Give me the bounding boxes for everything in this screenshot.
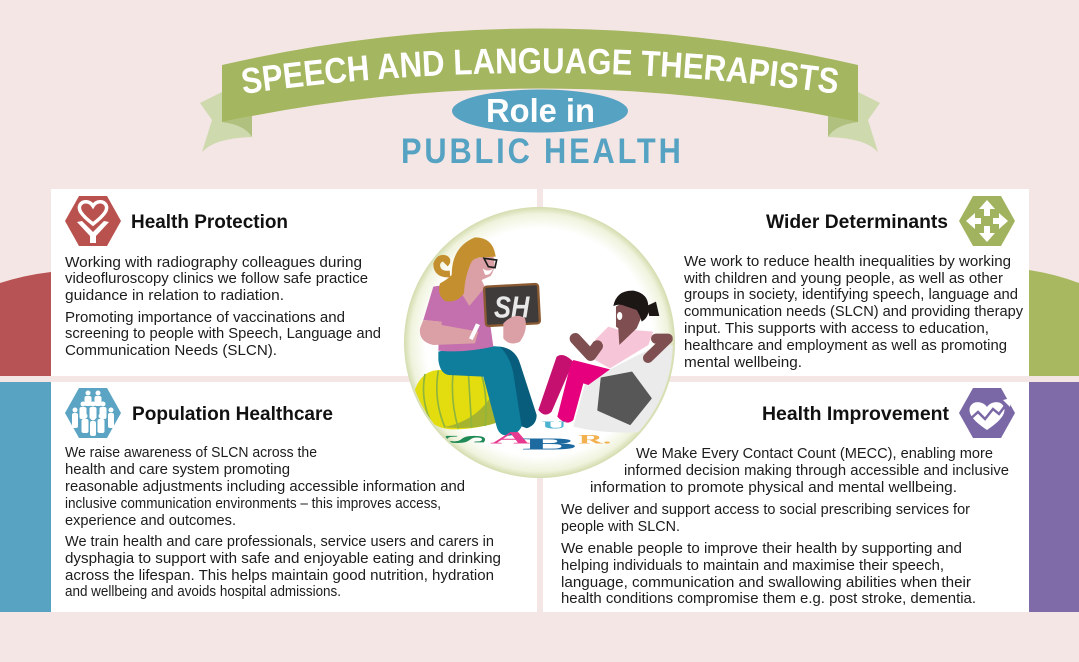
text block: wider determinants: healthcare and employment as well as promoting: [684, 338, 1007, 354]
subtitle: Role in: [452, 90, 628, 132]
panel: wider determinants: [543, 189, 1029, 376]
text block: health protection: Communication Needs (SLCN).: [65, 343, 277, 359]
therapist: [420, 237, 540, 436]
text block: population healthcare: inclusive communication environments – this improves access,: [65, 496, 441, 512]
therapist: SH: [494, 290, 530, 324]
text block: wider determinants: mental wellbeing.: [684, 355, 802, 371]
text block: population healthcare: health and care system promoting: [65, 462, 290, 478]
floor letters: [446, 422, 610, 450]
text block: health protection: Working with radiography colleagues during: [65, 255, 362, 271]
heading: health protection: Health Protection: [131, 211, 288, 233]
text block: health improvement: [561, 446, 1009, 607]
text block: health protection: Promoting importance of vaccinations and: [65, 310, 345, 326]
text block: wider determinants: communication needs (SLCN) and providing therapy: [684, 304, 1024, 320]
central illustration: therapist and child: [404, 207, 677, 478]
text block: wider determinants: [683, 254, 1024, 371]
text block: wider determinants: input. This supports with access to education,: [684, 321, 989, 337]
floor letters: U: [542, 419, 567, 431]
text block: health improvement: We deliver and support access to social prescribing services for: [561, 502, 970, 518]
panel: population healthcare: [51, 382, 537, 612]
subtitle: Role in: Role in: [486, 92, 595, 129]
text block: health improvement: information to promote physical and mental wellbeing.: [590, 480, 957, 496]
side band: purple: [1029, 382, 1079, 612]
text block: population healthcare: and wellbeing and avoids hospital admissions.: [65, 584, 341, 600]
side band: green: [1029, 270, 1079, 376]
text block: health protection: guidance in relation to radiation.: [65, 288, 284, 304]
side band: blue: [0, 382, 51, 612]
text block: health improvement: language, communication and swallowing abilities when their: [561, 575, 971, 591]
text block: health improvement: health conditions compromise them e.g. post stroke, dementia.: [561, 591, 976, 607]
text block: population healthcare: across the lifespan. This helps maintain good nutrition, hydration: [65, 568, 494, 584]
panel: health improvement: [543, 382, 1029, 612]
text block: health improvement: informed decision making through accessible and inclusive: [624, 463, 1009, 479]
icon: heart with rising arrow: [959, 388, 1015, 438]
icon: group of people: [65, 388, 121, 438]
beanbag and ball: [573, 343, 677, 433]
floor letters: S: [431, 435, 497, 444]
text block: wider determinants: We work to reduce health inequalities by working: [684, 254, 1011, 270]
text block: health improvement: We enable people to improve their health by supporting and: [561, 541, 962, 557]
side band: red: [0, 272, 51, 376]
text block: wider determinants: with children and young people, as well as other: [683, 271, 1003, 287]
child: [538, 291, 668, 423]
text block: health improvement: helping individuals to maintain and maximise their speech,: [561, 558, 944, 574]
panel: health protection: [51, 189, 537, 376]
text block: health protection: videofluroscopy clinics we follow safe practice: [65, 271, 368, 287]
text block: health protection: screening to people with Speech, Language and: [65, 326, 381, 342]
pouf: [413, 370, 497, 429]
text block: health improvement: We Make Every Contact Count (MECC), enabling more: [636, 446, 993, 462]
text block: population healthcare: dysphagia to support with safe and enjoyable eating and drinking: [65, 551, 501, 567]
heading: population healthcare: Population Healthcare: [132, 403, 333, 425]
subtitle: public health: PUBLIC HEALTH: [401, 131, 681, 170]
text block: population healthcare: reasonable adjustments including accessible information and: [65, 479, 465, 495]
heading: health improvement: Health Improvement: [762, 403, 949, 425]
text block: wider determinants: groups in society, identifying speech, language and: [684, 287, 1018, 303]
floor letters: B: [522, 434, 577, 453]
text block: population healthcare: We train health and care professionals, service users and carers in: [65, 534, 494, 550]
title: SPEECH AND LANGUAGE THERAPISTS: [242, 48, 838, 94]
text block: population healthcare: experience and outcomes.: [65, 513, 236, 529]
floor letters: R.: [578, 432, 611, 446]
icon: heart in hands: [65, 196, 121, 246]
icon: four-way arrows: [959, 196, 1015, 246]
text block: health improvement: people with SLCN.: [561, 519, 680, 535]
text block: population healthcare: [65, 445, 501, 600]
banner: [200, 28, 880, 152]
text block: population healthcare: We raise awareness of SLCN across the: [65, 445, 317, 461]
heading: wider determinants: Wider Determinants: [766, 211, 948, 233]
floor letters: A: [489, 428, 536, 447]
text block: health protection: [65, 255, 381, 359]
